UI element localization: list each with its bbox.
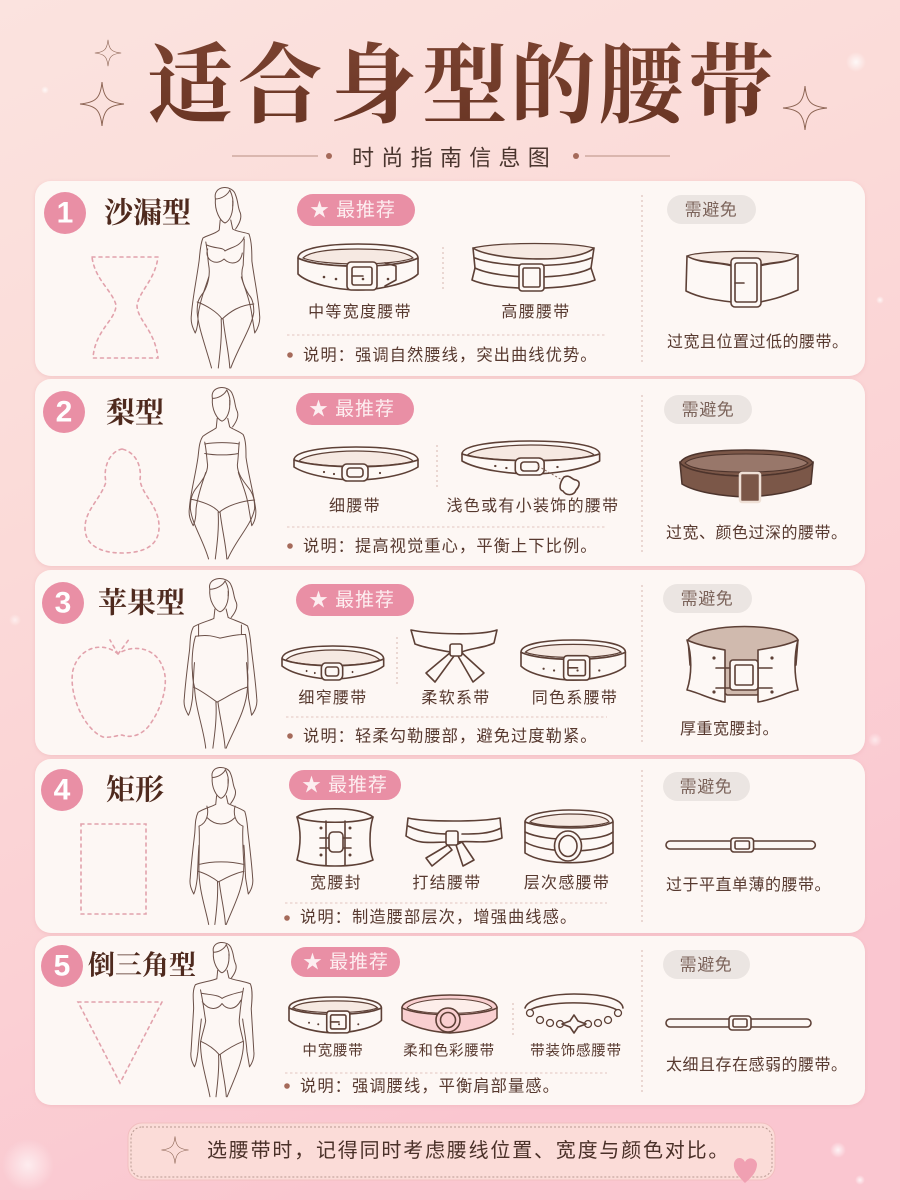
callout: footer tip [128, 1123, 775, 1183]
badge: avoid [663, 950, 750, 979]
badge: avoid: 需避免 [682, 400, 734, 420]
belt: decorative chain [525, 994, 623, 1033]
belt: wide low [686, 251, 798, 307]
label: 宽腰封 [310, 874, 362, 892]
heading: 梨型 [106, 396, 164, 430]
heading: 矩形 [106, 774, 164, 806]
belt: narrow [282, 646, 384, 680]
belt: too thin [666, 1016, 811, 1030]
label: 太细且存在感弱的腰带。 [666, 1056, 848, 1074]
badge: recommended [289, 770, 401, 800]
label: 中等宽度腰带 [308, 303, 412, 321]
number 5 [41, 945, 83, 987]
panel: hourglass [35, 181, 865, 376]
label: 厚重宽腰封。 [680, 720, 779, 738]
number 3: 3 [55, 586, 71, 620]
belt: heavy corset [687, 626, 798, 702]
belt: soft bow [411, 630, 497, 682]
subtitle: 时尚指南信息图 [352, 146, 557, 170]
figure: apple body [184, 578, 257, 748]
label: 柔软系带 [421, 689, 491, 707]
panel: inverted triangle [35, 936, 865, 1105]
title: 适合身型的腰带 [147, 38, 774, 134]
subtitle [232, 146, 670, 170]
badge: avoid [664, 395, 752, 424]
shape: apple outline [72, 638, 165, 737]
panel: apple [35, 570, 865, 755]
label: 打结腰带 [412, 874, 482, 892]
badge: avoid: 需避免 [681, 590, 733, 608]
number 5: 5 [54, 950, 70, 982]
badge: recommended [296, 393, 414, 425]
label: 同色系腰带 [532, 689, 618, 707]
belt: light with charm [462, 441, 600, 495]
panel: rectangle [35, 759, 865, 933]
note: 说明：轻柔勾勒腰部，避免过度勒紧。 [303, 728, 598, 746]
badge: avoid [663, 584, 752, 613]
label: 过于平直单薄的腰带。 [666, 876, 831, 894]
badge: recommended: ★ 最推荐 [309, 589, 395, 611]
callout: footer tip: 选腰带时，记得同时考虑腰线位置、宽度与颜色对比。 [207, 1139, 730, 1162]
figure: inverted triangle body [191, 942, 254, 1097]
number 3 [42, 582, 84, 624]
badge: recommended: ★ 最推荐 [310, 199, 396, 221]
label: 高腰腰带 [501, 303, 571, 321]
belt: dark wide [680, 450, 813, 502]
badge: avoid [663, 772, 750, 801]
note: 说明：制造腰部层次，增强曲线感。 [300, 908, 577, 926]
icon: heart [734, 1158, 757, 1183]
note: 说明：提高视觉重心，平衡上下比例。 [303, 538, 598, 556]
number 1: 1 [57, 196, 73, 230]
note: 说明：强调自然腰线，突出曲线优势。 [303, 346, 598, 364]
belt: medium wide [289, 997, 381, 1033]
icon: title sparkles [80, 40, 827, 130]
badge: recommended [296, 584, 414, 616]
belt: thin [294, 447, 418, 481]
label: 浅色或有小装饰的腰带 [446, 497, 620, 515]
belt: medium width [298, 244, 418, 290]
panel: pear [35, 379, 865, 566]
heading: 苹果型 [98, 586, 185, 620]
belt: wide corset [297, 809, 373, 866]
label: 柔和色彩腰带 [403, 1042, 495, 1060]
number 2: 2 [56, 396, 72, 428]
shape: triangle outline [78, 1002, 162, 1083]
number 4: 4 [54, 774, 71, 806]
shape: pear outline [85, 449, 159, 553]
badge: recommended: ★ 最推荐 [302, 774, 388, 796]
badge: avoid: 需避免 [685, 200, 737, 220]
belt: tonal [521, 640, 625, 680]
label: 带装饰感腰带 [530, 1042, 622, 1060]
label: 细窄腰带 [298, 689, 368, 707]
badge: avoid: 需避免 [680, 956, 732, 974]
shape: hourglass outline [92, 257, 158, 358]
belt: layered [525, 810, 613, 863]
label: 细腰带 [329, 497, 381, 515]
badge: avoid [667, 195, 756, 224]
heading: 沙漏型 [104, 196, 191, 230]
number 2 [43, 391, 85, 433]
figure: rectangle body [190, 767, 253, 924]
number 4 [41, 769, 83, 811]
badge: recommended [297, 194, 415, 226]
label: 过宽、颜色过深的腰带。 [666, 524, 848, 542]
figure: pear body [189, 388, 256, 559]
icon: sparkle [161, 1136, 189, 1164]
heading: 倒三角型 [88, 950, 196, 980]
shape: rectangle outline [81, 824, 146, 914]
belt: high waist [472, 244, 595, 291]
label: 过宽且位置过低的腰带。 [667, 333, 849, 351]
label: 层次感腰带 [524, 874, 610, 892]
badge: recommended: ★ 最推荐 [303, 951, 389, 973]
belt: flat slim [666, 838, 815, 852]
belt: knotted [406, 818, 502, 866]
number 1 [44, 192, 86, 234]
note: 说明：强调腰线，平衡肩部量感。 [300, 1078, 560, 1096]
badge: recommended: ★ 最推荐 [309, 398, 395, 420]
label: 中宽腰带 [302, 1042, 364, 1060]
figure: hourglass body [191, 188, 260, 368]
badge: recommended [291, 947, 400, 977]
belt: soft colour [402, 995, 497, 1033]
badge: avoid: 需避免 [680, 778, 732, 796]
